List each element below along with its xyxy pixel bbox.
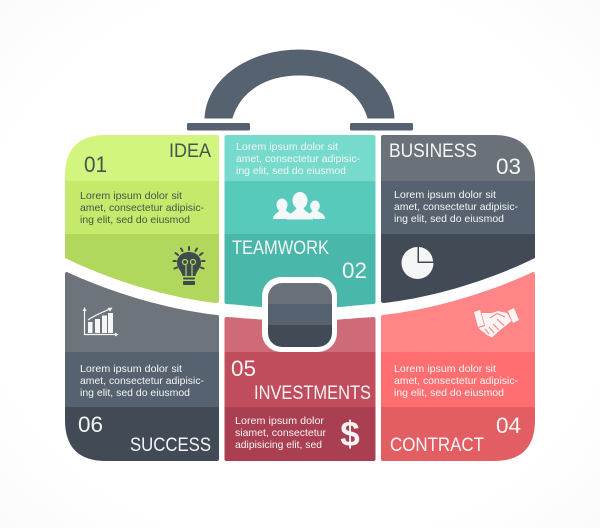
panel: 06 success: [65, 272, 219, 461]
briefcase clasp: [262, 277, 337, 352]
text block: idea: ing elit, sed do eiusmod: [80, 214, 190, 226]
number: 01: 01: [84, 152, 107, 177]
text block: idea: amet, consectetur adipisic-: [80, 202, 204, 214]
icon: dollar sign: $: [340, 415, 360, 454]
text block: contract: amet, consectetur adipisic-: [394, 375, 518, 387]
text block: teamwork: Lorem ipsum dolor sit: [236, 141, 338, 153]
text block: contract: ing elit, sed do eiusmod: [394, 387, 504, 399]
heading: idea: IDEA: [169, 141, 211, 162]
icon: handshake: [474, 308, 519, 338]
text block: investments: siamet, consectetur: [235, 427, 326, 439]
text block: teamwork: [236, 141, 360, 177]
panel: 04 contract: [381, 272, 535, 461]
icon: bar graph: [82, 307, 118, 336]
icon: people: [273, 192, 325, 220]
number: 02: 02: [342, 258, 367, 283]
text block: contract: Lorem ipsum dolor sit: [394, 363, 496, 375]
text block: teamwork: amet, consectetur adipisic-: [236, 153, 360, 165]
text block: investments: [235, 415, 326, 451]
panel: 02 teamwork: [224, 135, 376, 308]
panel: 01 idea: [65, 135, 219, 303]
text block: business: Lorem ipsum dolor sit: [394, 189, 496, 201]
heading: investments: INVESTMENTS: [254, 383, 371, 404]
text block: investments: adipisicing elit, sed: [235, 439, 322, 451]
panel: 05 investments: [224, 317, 376, 461]
panel: 03 business: [381, 135, 535, 303]
heading: contract: CONTRACT: [390, 435, 484, 456]
text block: idea: Lorem ipsum dolor sit: [80, 190, 182, 202]
briefcase handle: [187, 50, 413, 130]
text block: business: [394, 189, 518, 225]
text block: investments: Lorem ipsum dolor: [235, 415, 325, 427]
number: 06: 06: [78, 412, 103, 437]
text block: success: [80, 363, 204, 399]
text block: business: ing elit, sed do eiusmod: [394, 213, 504, 225]
text block: success: ing elit, sed do eiusmod: [80, 387, 190, 399]
text block: success: Lorem ipsum dolor sit: [80, 363, 182, 375]
heading: success: SUCCESS: [130, 435, 211, 456]
heading: business: BUSINESS: [389, 141, 477, 162]
text block: teamwork: ing elit, sed do eiusmod: [236, 165, 346, 177]
heading: teamwork: TEAMWORK: [232, 238, 329, 259]
briefcase infographic: [65, 50, 535, 461]
text block: success: amet, consectetur adipisic-: [80, 375, 204, 387]
icon: light bulb: [174, 247, 204, 285]
number: 03: 03: [496, 154, 521, 179]
text block: contract: [394, 363, 518, 399]
number: 04: 04: [496, 413, 521, 438]
number: 05: 05: [231, 356, 256, 381]
text block: idea: [80, 190, 204, 226]
icon: pie chart: [402, 246, 434, 279]
text block: business: amet, consectetur adipisic-: [394, 201, 518, 213]
